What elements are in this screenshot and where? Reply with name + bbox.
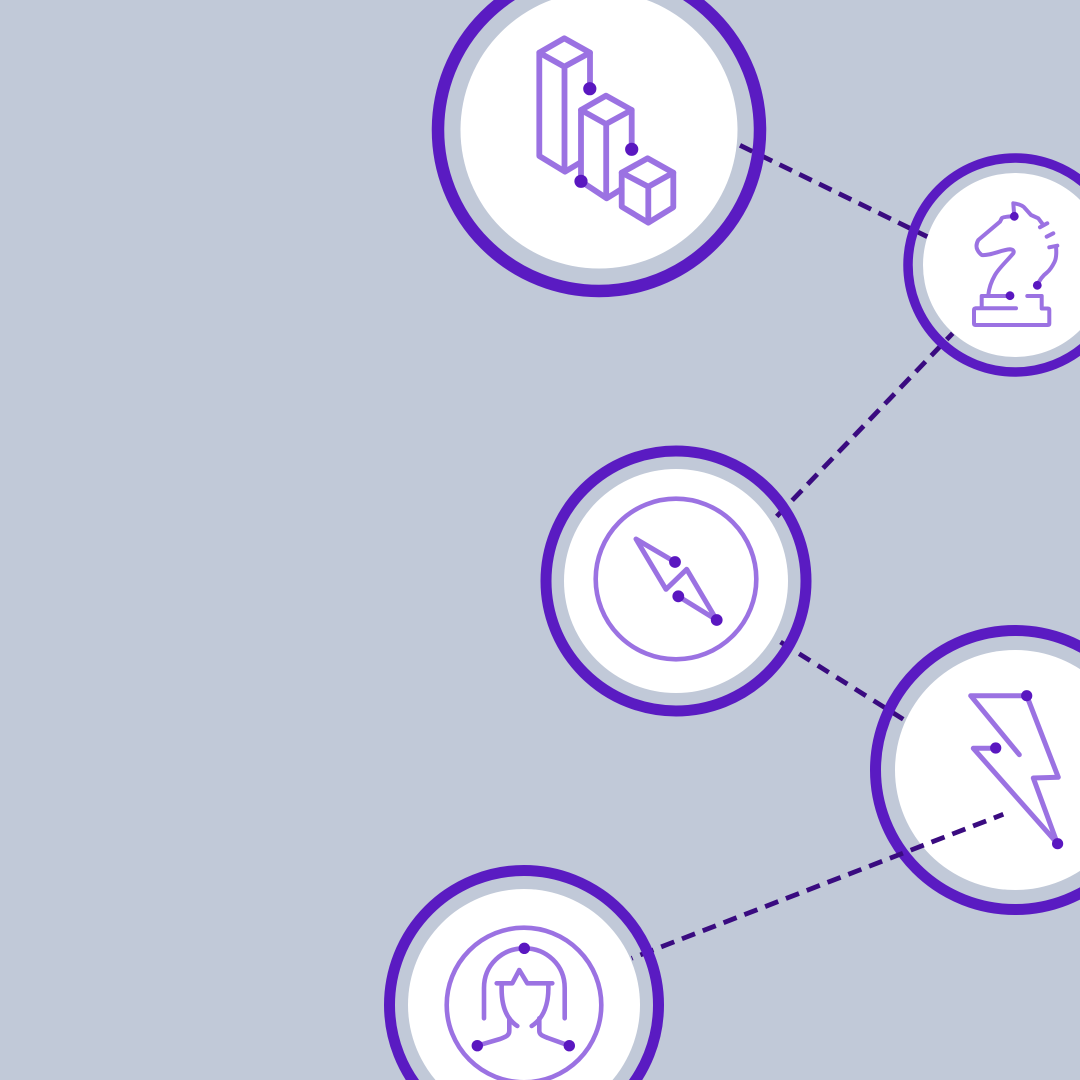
icon: chess knight xyxy=(974,203,1057,325)
white disc: compass circle xyxy=(564,469,788,693)
icon: person portrait xyxy=(447,928,601,1080)
white disc: top circle xyxy=(460,0,738,268)
icon: descending 3D bars xyxy=(539,38,673,223)
white disc: knight circle xyxy=(923,173,1080,357)
white disc: bolt circle xyxy=(895,650,1080,890)
ring: knight circle xyxy=(908,158,1080,372)
ring: bolt circle xyxy=(876,630,1080,910)
icon: compass xyxy=(596,499,756,659)
dashed connector: bolt to person xyxy=(632,814,1003,958)
white disc: person circle xyxy=(408,889,640,1080)
dashed connector: compass to bolt xyxy=(780,642,903,719)
ring: top circle xyxy=(438,0,760,291)
dashed connector: knight to compass xyxy=(772,333,953,522)
ring: compass circle xyxy=(546,451,806,711)
dashed connector: bars to knight xyxy=(740,145,927,237)
ring: person circle xyxy=(390,870,658,1080)
icon: lightning bolt xyxy=(971,690,1063,849)
